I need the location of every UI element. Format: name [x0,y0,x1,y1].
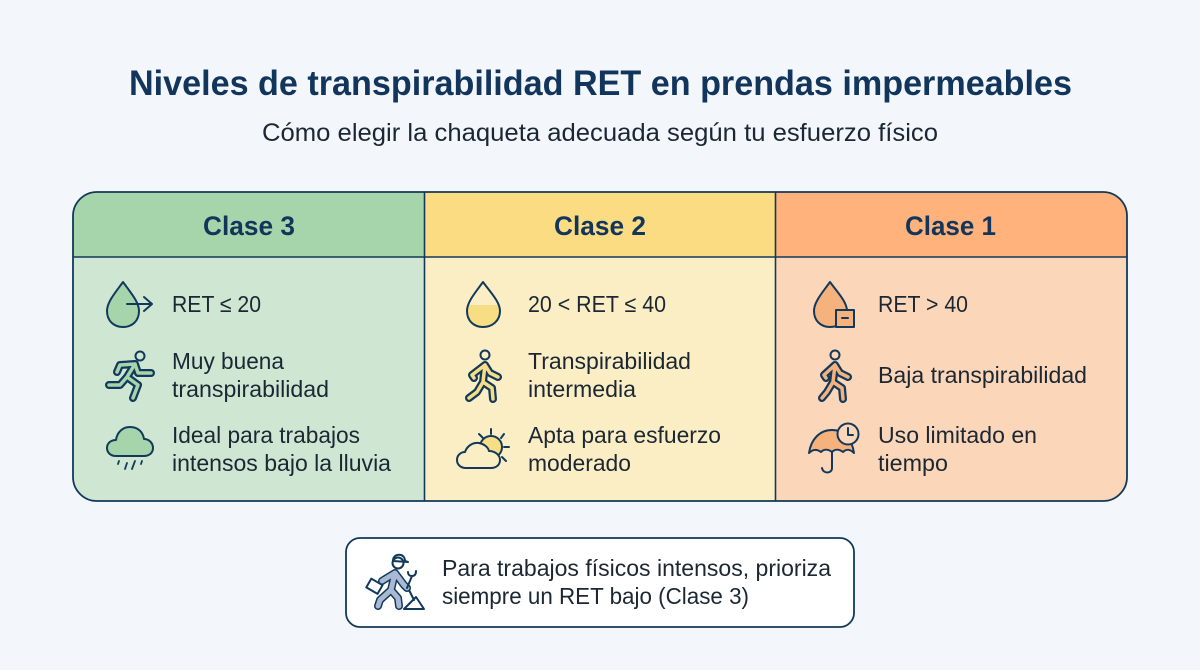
text: breathability: Baja transpirabilidad [878,362,1087,388]
panel: Clase 3 [107,211,391,476]
icon: half-filled drop [467,282,500,327]
subtitle: Cómo elegir la chaqueta adecuada según tu esfuerzo físico [262,119,938,147]
text: breathability: transpirabilidad [172,376,329,402]
text: use: moderado [528,450,631,476]
icon: umbrella with clock [809,424,858,472]
icon: worker with tools [366,555,424,609]
text: RET value: 20 < RET ≤ 40 [528,291,666,317]
text: breathability: Transpirabilidad [528,348,691,374]
icon: walker [469,350,498,399]
callout text: siempre un RET bajo (Clase 3) [442,583,749,609]
comparison table [73,192,1127,501]
text: use: Ideal para trabajos [172,422,360,448]
icon: walker [822,350,848,399]
text: breathability: Muy buena [172,348,284,374]
icon: drop with blocked square [814,282,854,327]
text: use: Apta para esfuerzo [528,422,721,448]
text: use: intensos bajo la lluvia [172,450,391,476]
icon: drop with arrow [107,282,152,327]
table backgrounds [73,192,1127,501]
callout text: Para trabajos físicos intensos, prioriza [442,555,831,581]
icon: rain cloud [107,427,153,469]
callout box [346,538,854,627]
text: use: tiempo [878,450,948,476]
text: RET value: RET > 40 [878,291,968,317]
text: breathability: intermedia [528,376,636,402]
icon: runner [109,352,151,398]
heading: Clase 3: Clase 3 [203,211,295,241]
text: use: Uso limitado en [878,422,1037,448]
panel: Clase 2 [457,211,721,476]
panel: Clase 1 [809,211,1087,476]
title: Niveles de transpirabilidad RET en prendas impermeables [129,64,1072,103]
heading: Clase 1: Clase 1 [905,211,996,241]
heading: Clase 2: Clase 2 [554,211,646,241]
icon: sun behind cloud [457,429,509,468]
callout [346,538,854,627]
text: RET value: RET ≤ 20 [172,291,261,317]
